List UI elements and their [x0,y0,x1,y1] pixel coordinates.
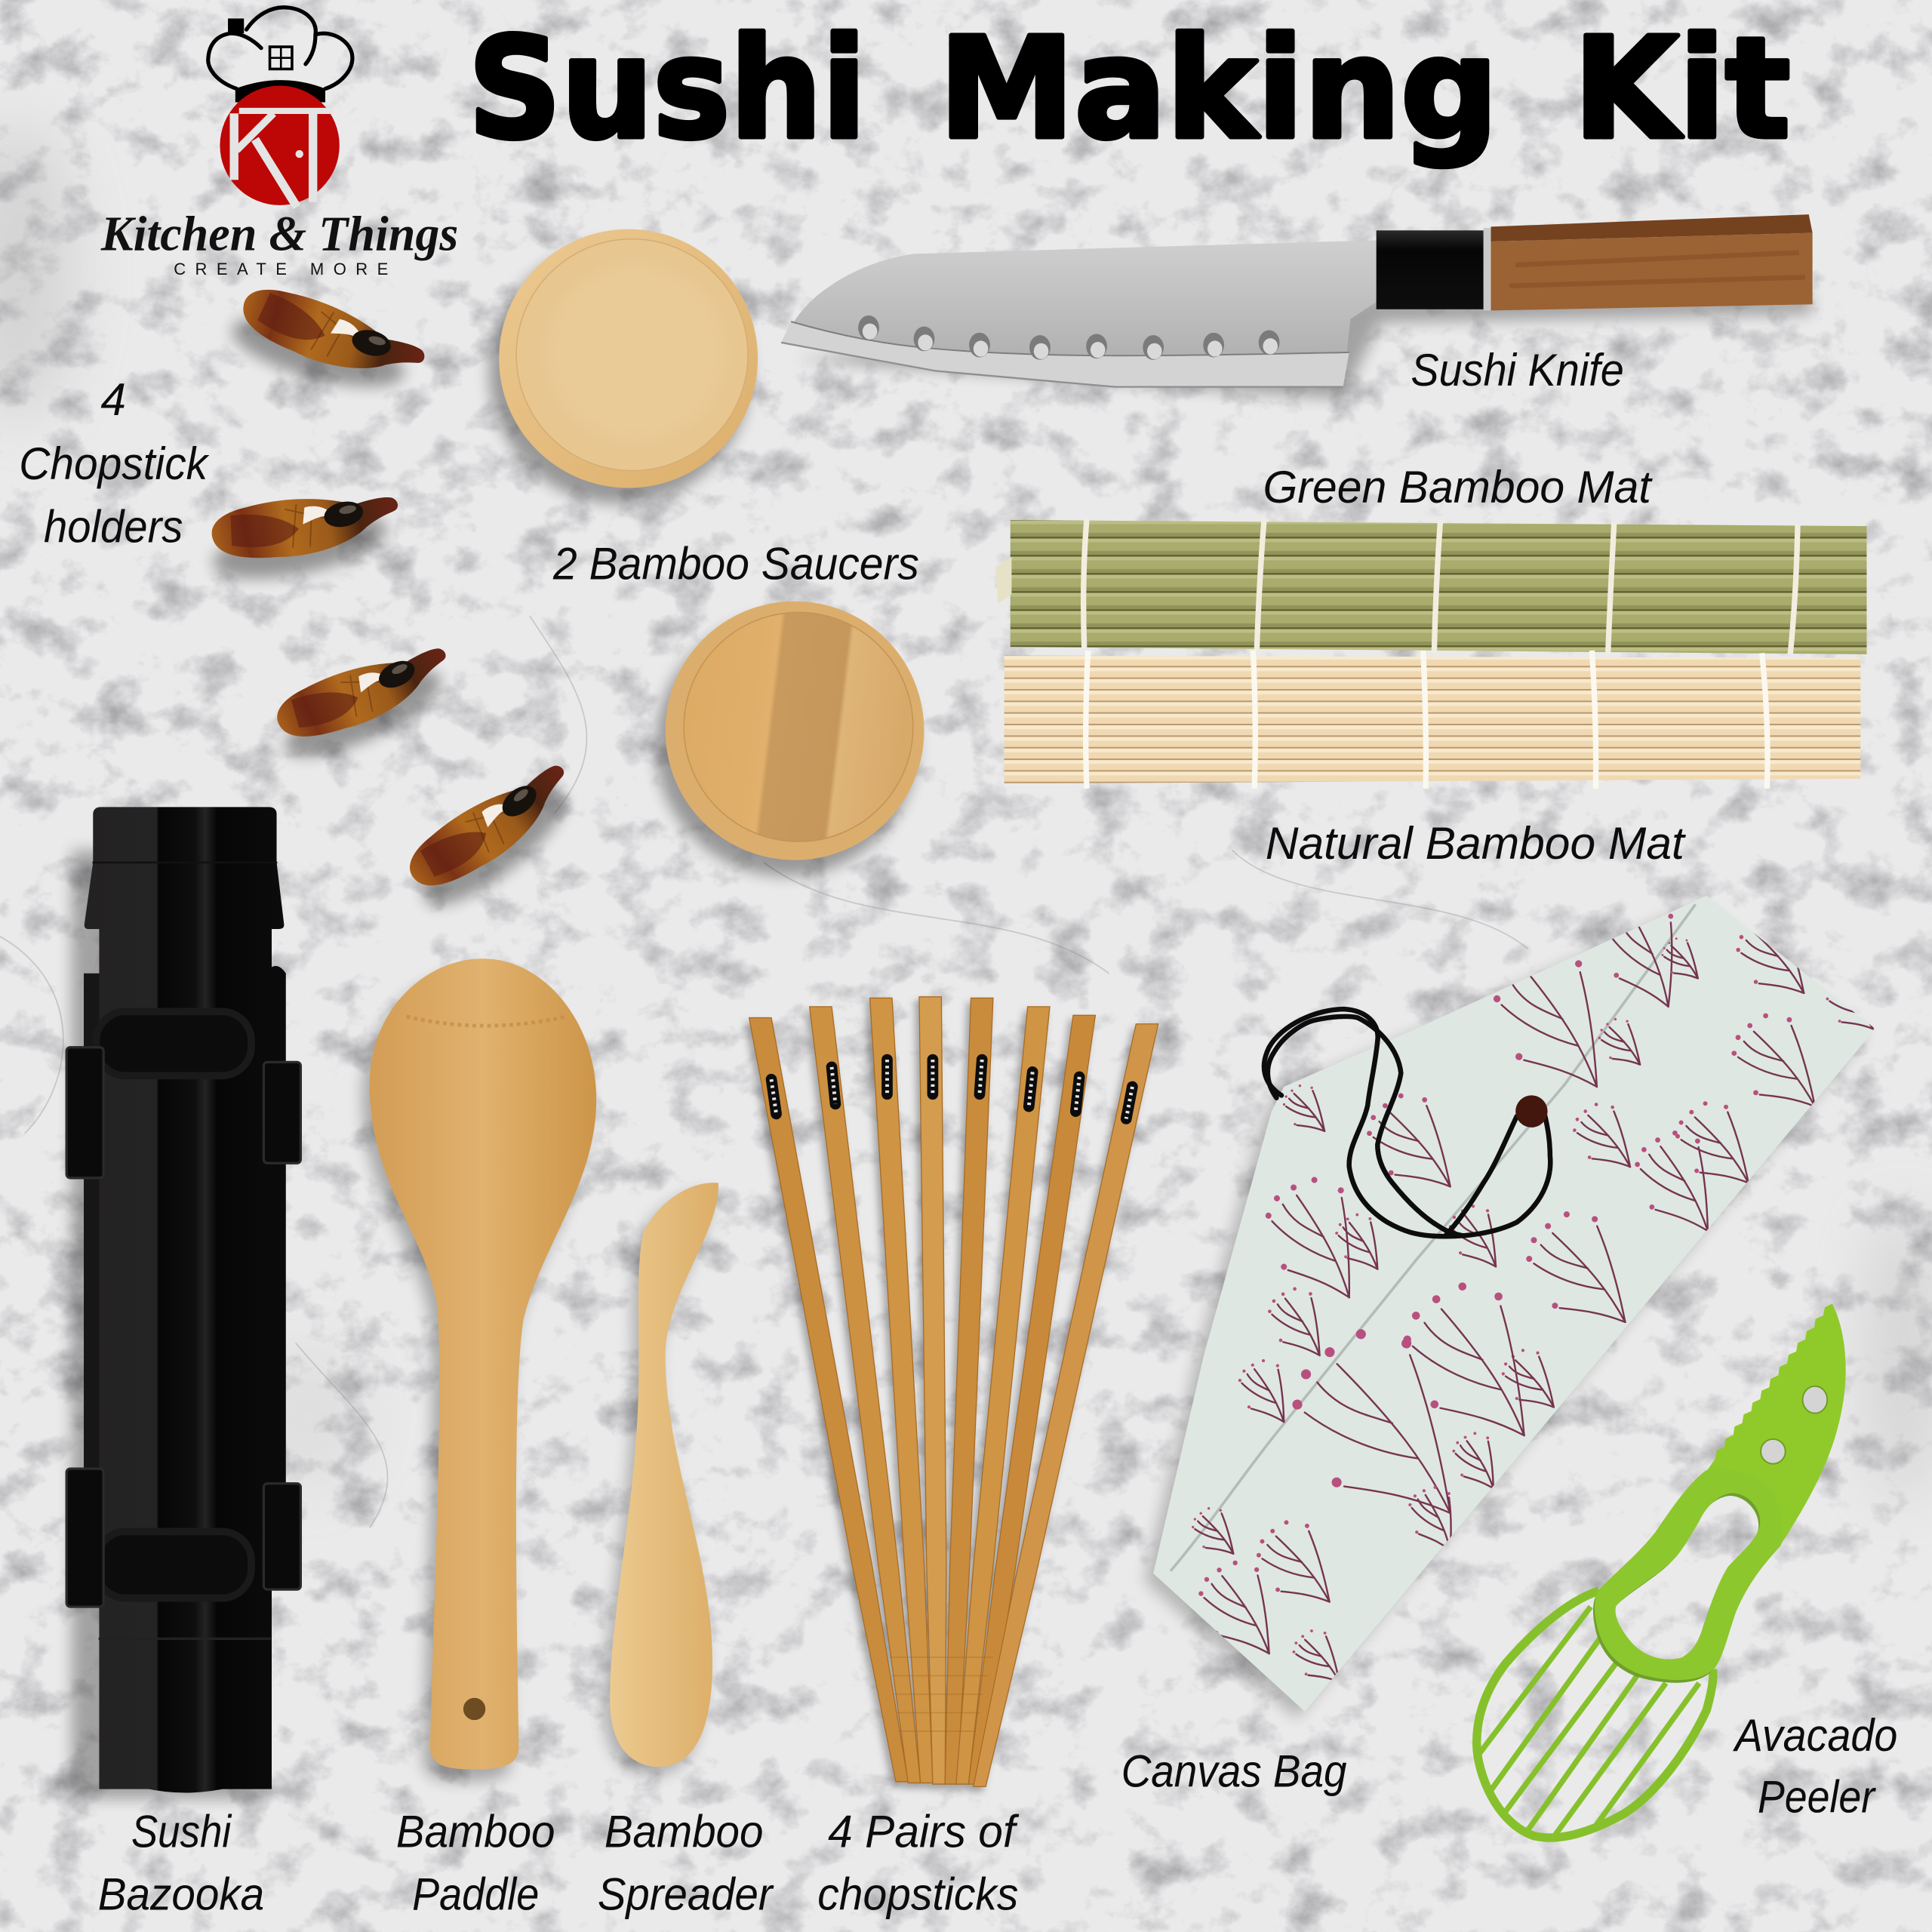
label: bamboo paddle [396,1805,555,1920]
label: avocado peeler: Avacado [1733,1709,1897,1761]
peeler blade holes [1761,1386,1827,1464]
icon: drawstring cord and bead [1264,1009,1550,1236]
peeler serrated blade [1706,1303,1846,1545]
label: bamboo saucers: 2 Bamboo Saucers [552,537,919,589]
label: canvas bag: Canvas Bag [1121,1745,1347,1796]
icon: avocado peeler [1475,1303,1846,1847]
label: natural bamboo mat: Natural Bamboo Mat [1266,817,1686,869]
label: chopstick holders: 4 [100,374,126,425]
icon: bamboo spreader [604,1183,718,1776]
title: Kit [1574,8,1790,170]
label: sushi bazooka: Sushi [131,1805,232,1857]
label: chopstick holders: holders [44,500,183,552]
icon: chopstick holder ducks [203,281,592,922]
label: chopstick holders [19,374,210,552]
label: bamboo paddle: Bamboo [396,1805,555,1857]
label: chopsticks [817,1805,1019,1920]
icon: natural bamboo mat [1004,651,1860,789]
label: avocado peeler [1733,1709,1897,1823]
icon: sushi knife [781,214,1813,399]
logo: Kitchen & Things [100,8,458,278]
icon: bamboo saucer 1 [489,229,758,504]
label: chopstick holders: Chopstick [19,438,210,489]
peeler slicer rim [1477,1591,1713,1838]
label: bamboo paddle: Paddle [412,1869,539,1920]
logo wordmark: Kitchen & Things [100,207,458,261]
peeler handle shadow [1593,1473,1779,1683]
icon: chef hat [208,8,352,103]
title: Making [939,8,1498,170]
label: sushi bazooka: Bazooka [98,1869,264,1920]
icon: sushi bazooka [66,807,300,1799]
label: chopsticks: 4 Pairs of [828,1805,1019,1857]
label: green bamboo mat: Green Bamboo Mat [1263,461,1653,512]
icon: red circle with KT monogram [220,85,340,207]
icon: chopsticks [749,997,1158,1786]
label: sushi bazooka [98,1805,264,1920]
title [468,8,1790,170]
label: bamboo spreader: Spreader [598,1869,774,1920]
icon: bamboo paddle [362,958,596,1782]
peeler handle ring [1595,1469,1781,1679]
icon: canvas bag [1145,892,1875,1719]
peeler slicer wires [1475,1607,1699,1847]
label: bamboo spreader: Bamboo [605,1805,763,1857]
label: avocado peeler: Peeler [1758,1771,1877,1823]
title: Sushi [468,8,866,170]
label: bamboo spreader [598,1805,774,1920]
icon: bamboo saucer 2 [656,601,924,876]
label: chopsticks: chopsticks [817,1869,1018,1920]
icon: green bamboo mat [995,518,1866,654]
logo tagline: CREATE MORE [174,260,388,278]
label: sushi knife: Sushi Knife [1411,344,1624,395]
